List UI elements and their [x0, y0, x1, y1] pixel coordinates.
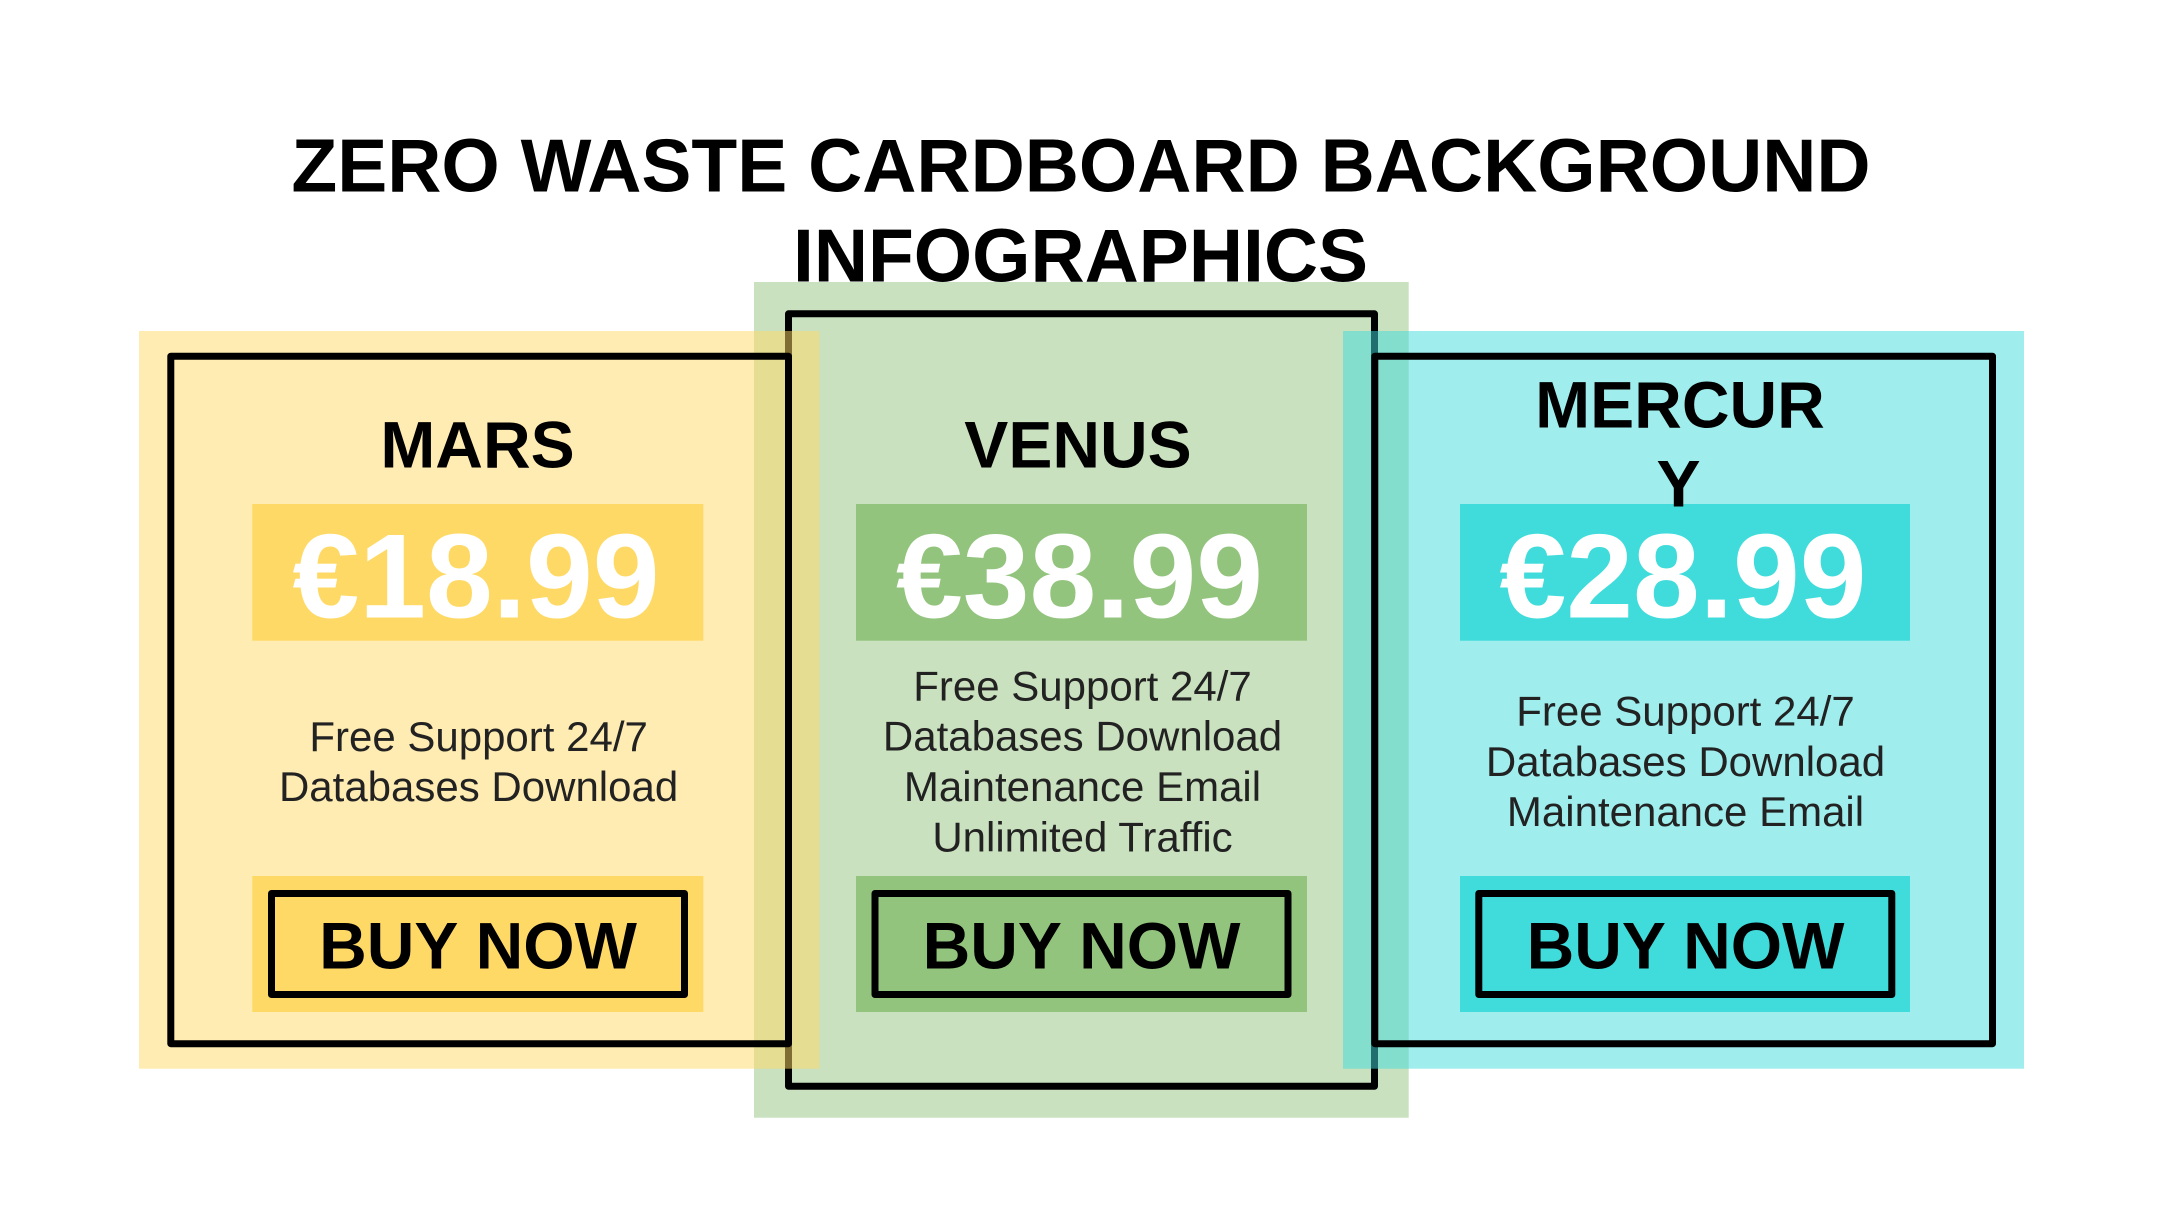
- panel: Mercury: [1343, 331, 2024, 1069]
- Mercury name: MERCUR: [1535, 367, 1825, 441]
- panel: Mars: [139, 331, 820, 1069]
- Mercury features: Maintenance Email: [1507, 788, 1864, 835]
- Venus panel frame: [788, 314, 1374, 1086]
- title: [291, 124, 1871, 298]
- title: INFOGRAPHICS: [793, 214, 1368, 298]
- Venus name: VENUS: [964, 407, 1192, 481]
- Venus features: Free Support 24/7: [913, 662, 1252, 709]
- Venus panel background: [754, 282, 1409, 1118]
- Mars panel background: [139, 331, 820, 1069]
- Venus buy button: [856, 876, 1307, 1012]
- Mercury name: Y: [1656, 446, 1701, 520]
- Mercury panel background: [1343, 331, 2024, 1069]
- Mars name: MARS: [380, 407, 575, 481]
- Mars buy button: BUY NOW: [319, 909, 638, 983]
- Venus features: Maintenance Email: [904, 763, 1261, 810]
- Venus features: [883, 662, 1282, 860]
- Venus price: €38.99: [896, 510, 1263, 644]
- Mercury features: [1486, 688, 1885, 835]
- Mercury price: €28.99: [1499, 510, 1867, 644]
- Venus features: Unlimited Traffic: [932, 813, 1233, 860]
- panel: Venus: [754, 282, 1409, 1118]
- Mercury features: Free Support 24/7: [1516, 688, 1855, 734]
- Venus features: Databases Download: [883, 713, 1282, 760]
- Mars panel frame: [171, 356, 789, 1044]
- Mercury buy button: BUY NOW: [1527, 909, 1845, 983]
- Mars features: Free Support 24/7: [309, 713, 648, 760]
- Mars price: €18.99: [292, 510, 660, 644]
- Mars buy button: [252, 876, 703, 1012]
- Venus buy button: BUY NOW: [923, 909, 1241, 983]
- Mars features: [279, 713, 678, 810]
- Mercury buy button: [1460, 876, 1910, 1012]
- title: ZERO WASTE CARDBOARD BACKGROUND: [291, 124, 1871, 208]
- Mercury panel frame: [1375, 356, 1992, 1044]
- Mars features: Databases Download: [279, 763, 678, 810]
- Mercury features: Databases Download: [1486, 738, 1885, 785]
- Mercury name: [1535, 367, 1825, 520]
